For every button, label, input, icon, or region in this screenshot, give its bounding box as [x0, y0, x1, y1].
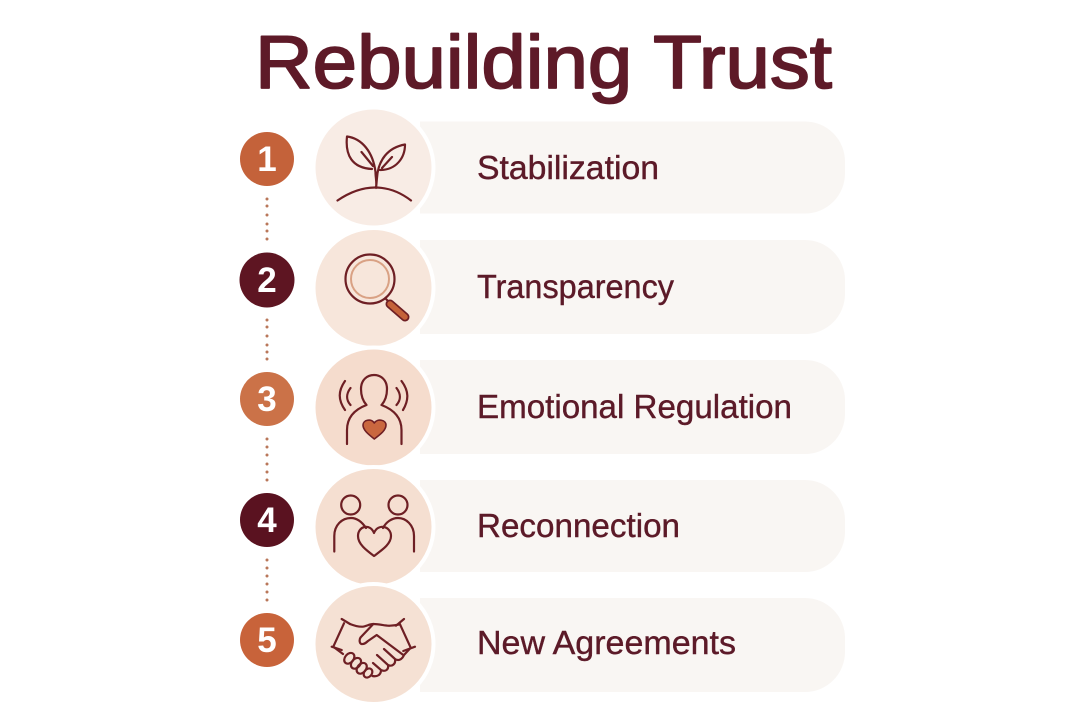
number badge 4	[240, 493, 294, 547]
label bar 4	[420, 480, 845, 572]
number badge 1	[240, 132, 294, 186]
connector: 2 to 3	[266, 318, 268, 360]
label text 4: Reconnection	[477, 507, 680, 544]
label text 2: Transparency	[477, 268, 674, 305]
number badge 3: 3	[257, 380, 277, 419]
step 1: Stabilization	[240, 106, 845, 230]
step 3: Emotional Regulation	[240, 346, 845, 470]
connector: 4 to 5	[266, 558, 268, 602]
label text 3: Emotional Regulation	[477, 388, 792, 425]
number badge 2	[240, 252, 294, 308]
number badge 4: 4	[257, 501, 277, 540]
icon: magnifying glass	[312, 226, 436, 350]
step 4: Reconnection	[240, 465, 845, 589]
icon: handshake	[312, 582, 436, 706]
label bar 2	[420, 240, 845, 334]
title: Rebuilding Trust	[255, 20, 832, 104]
label text 5: New Agreements	[477, 624, 736, 661]
label bar 1	[420, 122, 845, 214]
number badge 2: 2	[257, 261, 277, 300]
icon: person with heart	[312, 346, 436, 470]
number badge 5	[240, 613, 294, 667]
number badge 3	[240, 372, 294, 426]
step 5: New Agreements	[240, 582, 845, 706]
icon: two people and heart	[312, 465, 436, 589]
number badge 5: 5	[257, 621, 277, 660]
label text 1: Stabilization	[477, 149, 659, 186]
connector: 1 to 2	[266, 198, 268, 240]
step 2: Transparency	[240, 226, 845, 350]
connector: 3 to 4	[266, 438, 268, 482]
label bar 3	[420, 360, 845, 454]
number badge 1: 1	[257, 140, 277, 179]
label bar 5	[420, 598, 845, 692]
icon: sprout	[312, 106, 436, 230]
